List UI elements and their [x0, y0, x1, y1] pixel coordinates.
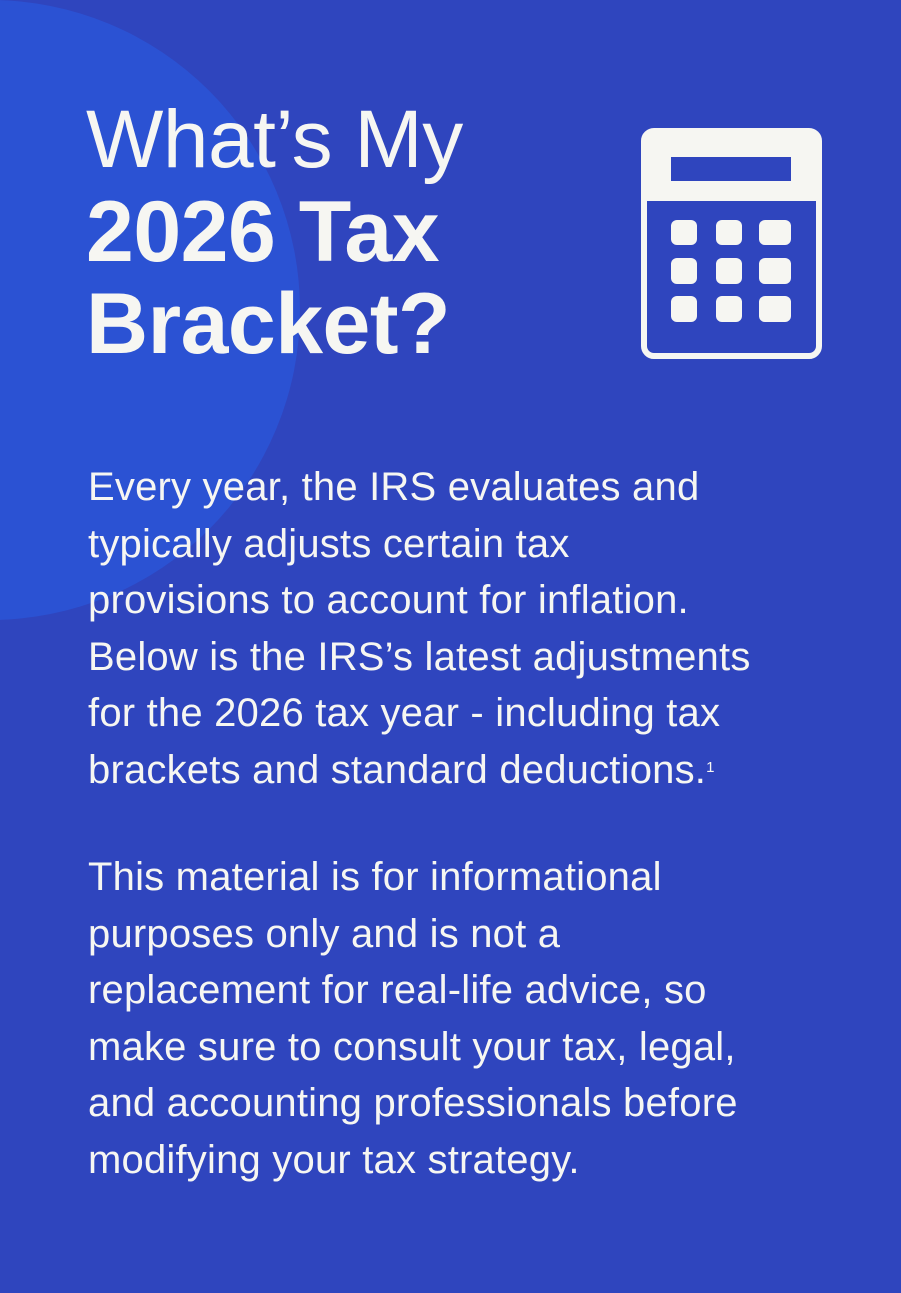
decorative circle [0, 0, 300, 620]
text block: intro: Below is the IRS’s latest adjustments [88, 634, 751, 678]
icon: calculator [641, 128, 822, 359]
title: 2026 Tax [86, 184, 439, 280]
text block: disclaimer [88, 855, 738, 1182]
title: What’s My [86, 94, 463, 185]
text block: intro: brackets and standard deductions.1 [88, 748, 715, 792]
text block: disclaimer: This material is for informational [88, 855, 662, 899]
title [86, 94, 464, 372]
text block: intro: for the 2026 tax year - including tax [88, 691, 720, 735]
text block: disclaimer: and accounting professionals before [88, 1081, 738, 1125]
text block: intro: provisions to account for inflation. [88, 578, 689, 622]
text block: disclaimer: make sure to consult your tax, legal, [88, 1024, 736, 1068]
text block: intro: typically adjusts certain tax [88, 522, 570, 566]
text block: disclaimer: replacement for real-life advice, so [88, 968, 707, 1012]
text block: disclaimer: modifying your tax strategy. [88, 1138, 580, 1182]
text block: intro: Every year, the IRS evaluates and [88, 465, 699, 509]
text block: intro [88, 465, 751, 792]
title: Bracket? [86, 276, 450, 372]
text block: disclaimer: purposes only and is not a [88, 912, 560, 956]
